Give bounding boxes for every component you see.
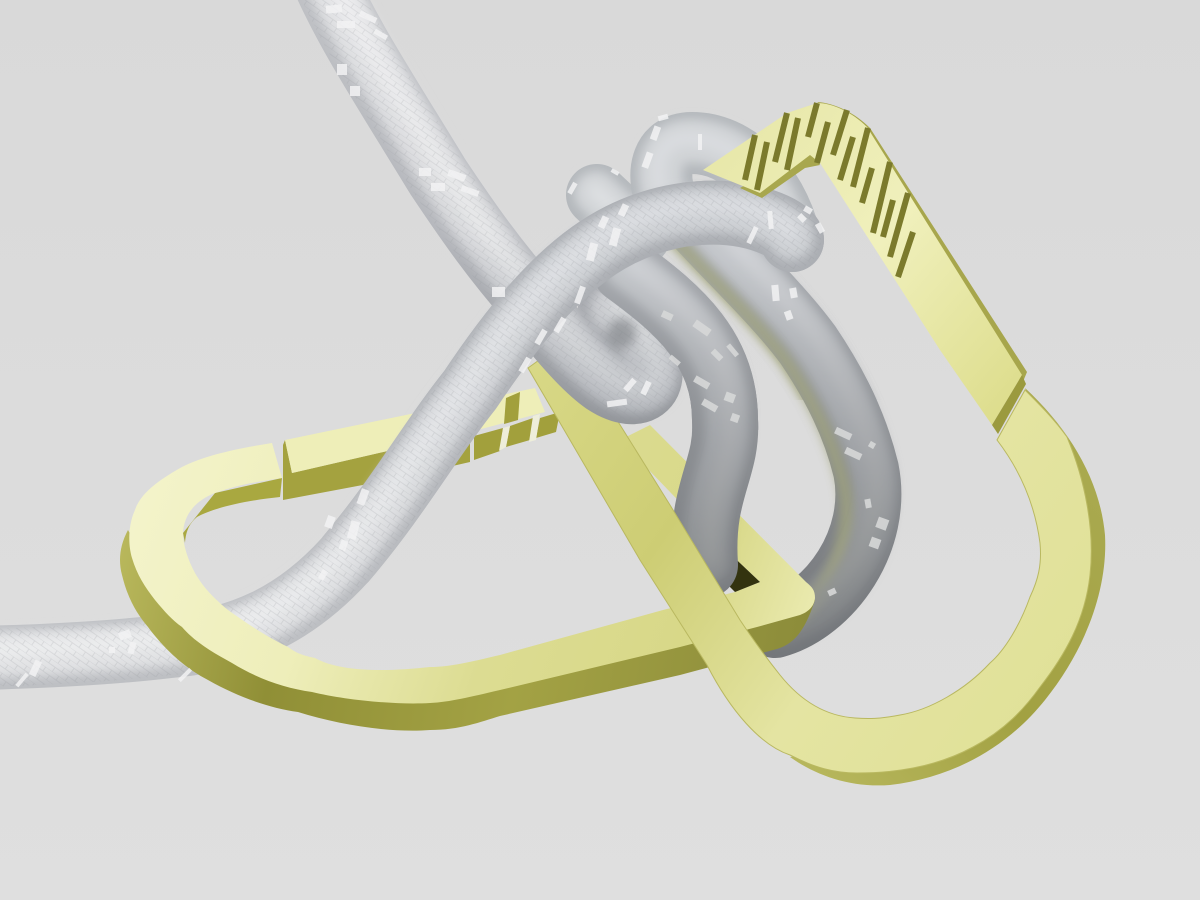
rope flecks on shaded strands xyxy=(661,310,889,596)
rope: big right loop xyxy=(668,205,876,641)
right carabiner: bar stub behind knot xyxy=(583,290,623,328)
right carabiner: outer side wall xyxy=(790,388,1105,785)
left carabiner xyxy=(120,388,815,731)
knot interior shadow xyxy=(608,318,636,348)
left carabiner: gate bar top xyxy=(285,388,545,473)
rope: small knob at top of knot xyxy=(594,190,640,235)
gate: teeth slots xyxy=(745,103,913,277)
rope: main strand over the knot xyxy=(334,180,824,580)
left carabiner: inner wall xyxy=(183,478,282,543)
rope: middle strand upper section xyxy=(598,254,758,430)
right carabiner: bar and U-shaped top face xyxy=(528,345,1091,773)
rope flecks xyxy=(15,4,825,687)
gate: top face xyxy=(703,103,1022,425)
left carabiner: dark opening behind rope xyxy=(718,547,760,592)
rope: big loop upper section over middle strand xyxy=(670,245,877,400)
left carabiner: gate light slots xyxy=(499,414,540,451)
rope: lower-left section running behind the carabiner xyxy=(0,205,792,658)
gate: underside xyxy=(740,152,820,198)
rope: upper loop behind gate xyxy=(657,138,790,238)
rope: long strand from top ending in knot xyxy=(320,0,658,392)
rope: middle strand passing over the carabiner arm xyxy=(625,264,731,565)
left carabiner: gate bar side xyxy=(283,432,470,500)
right carabiner xyxy=(528,290,1105,785)
gate: thin outer side xyxy=(817,102,1027,384)
gate: end cap xyxy=(992,375,1026,434)
left carabiner: top face xyxy=(129,425,815,703)
carabiner gate with teeth xyxy=(703,102,1027,434)
left carabiner: side wall xyxy=(120,530,815,731)
left carabiner: gate teeth xyxy=(474,392,560,460)
